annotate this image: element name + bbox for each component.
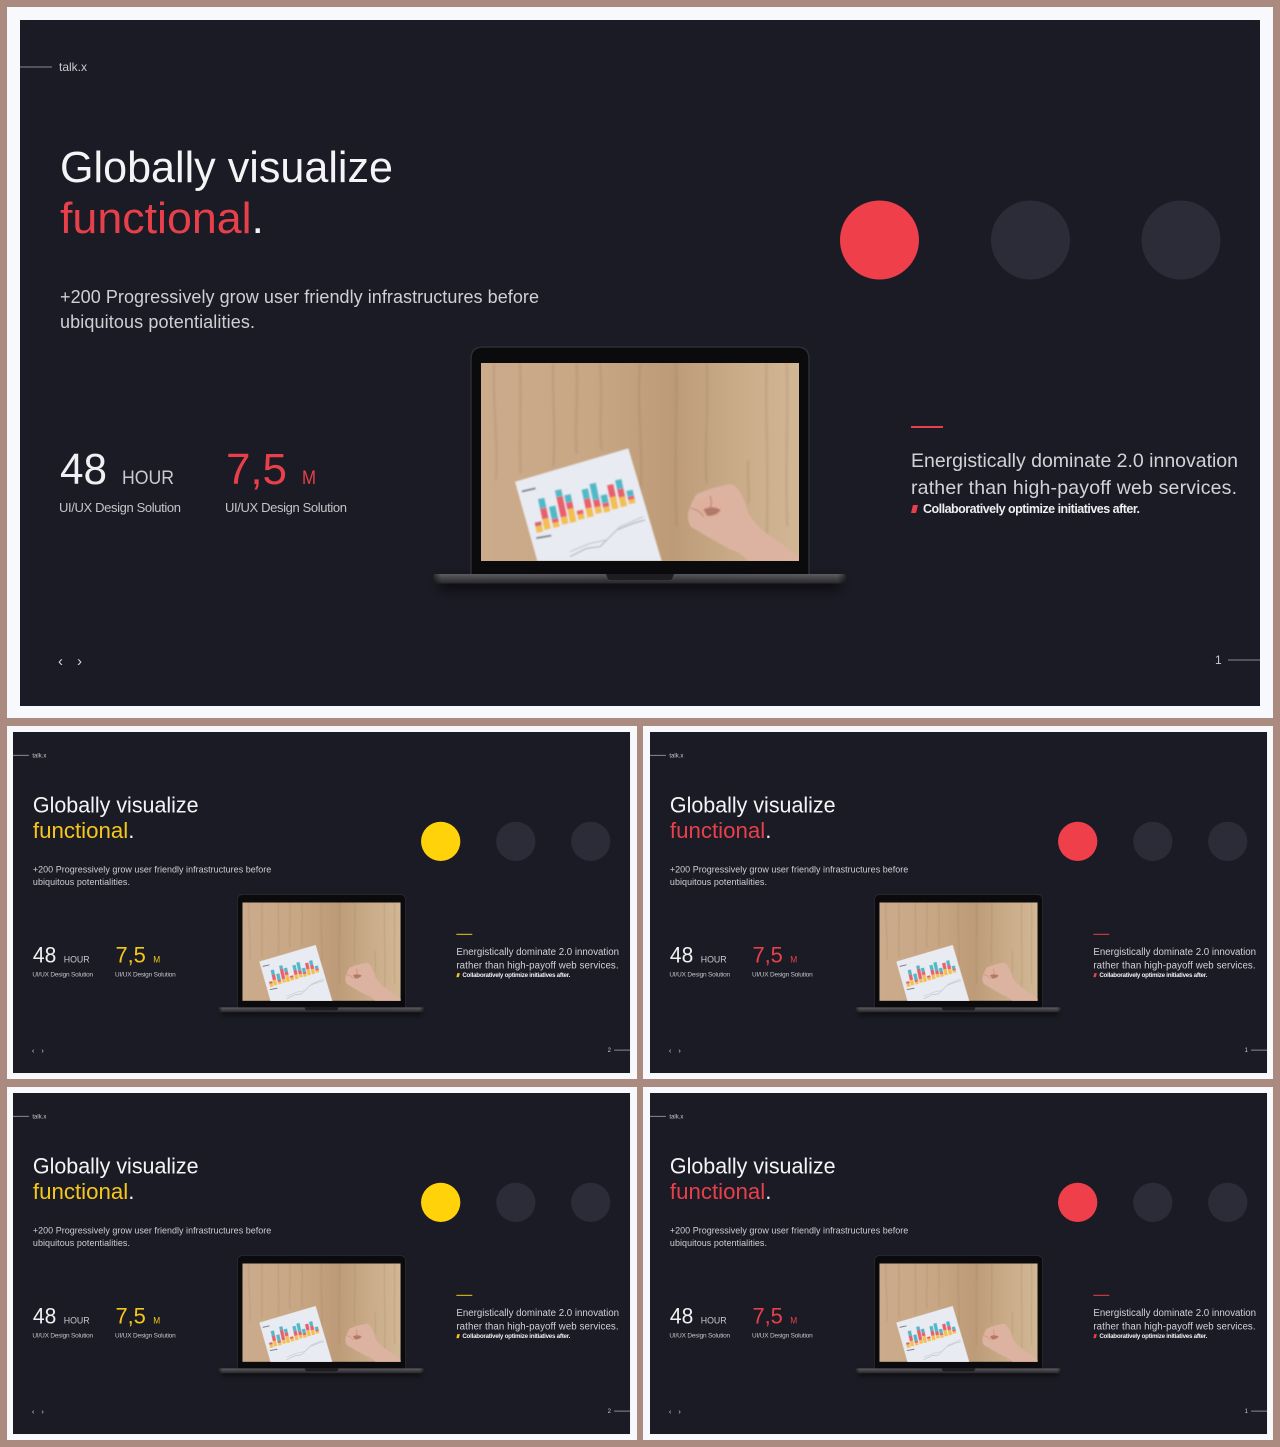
panel: slide 2 yellow, top left <box>7 726 637 1079</box>
slide frame <box>643 726 1273 1079</box>
slide content: 7,5 <box>116 1304 146 1329</box>
slide content: +200 Progressively grow user friendly infrastructures before <box>33 865 271 875</box>
slide content: Collaboratively optimize initiatives after. <box>462 972 571 979</box>
slide content: 48 <box>670 1304 693 1329</box>
panel: main slide <box>7 7 1273 718</box>
slide content: 1 <box>1245 1409 1249 1415</box>
intro text: ubiquitous potentialities. <box>60 312 255 332</box>
slide content: ubiquitous potentialities. <box>33 1238 130 1248</box>
slide content: +200 Progressively grow user friendly infrastructures before <box>670 865 908 875</box>
brand label: talk.x <box>59 60 87 74</box>
slide content: › <box>678 1407 681 1416</box>
slide content: M <box>790 1316 797 1327</box>
slide content: 7,5 <box>116 943 146 968</box>
slide content: UI/UX Design Solution <box>669 972 731 979</box>
slide content: talk.x <box>32 1114 46 1120</box>
slide content: UI/UX Design Solution <box>752 972 813 979</box>
slide content: functional. <box>670 818 771 843</box>
slide frame <box>7 726 637 1079</box>
slide content: talk.x <box>669 753 683 759</box>
slide content: functional. <box>670 1179 771 1204</box>
slide content <box>650 1093 1267 1434</box>
slide content: HOUR <box>701 1316 727 1327</box>
title <box>60 143 393 243</box>
slide content: UI/UX Design Solution <box>32 972 94 979</box>
slide content: UI/UX Design Solution <box>669 1333 731 1340</box>
stat: 7,5 M: M <box>302 468 316 489</box>
slide content: HOUR <box>64 955 90 966</box>
panel: slide 1 red, bottom right <box>643 1087 1273 1440</box>
slide background <box>20 20 1260 706</box>
slide content: 2 <box>608 1048 612 1054</box>
slide content: UI/UX Design Solution <box>115 972 176 979</box>
slide content: +200 Progressively grow user friendly infrastructures before <box>670 1226 908 1236</box>
slide content: talk.x <box>32 753 46 759</box>
slide content: Collaboratively optimize initiatives after. <box>1099 1333 1208 1340</box>
slide content: Globally visualize <box>670 1154 836 1179</box>
slide content: UI/UX Design Solution <box>115 1333 176 1340</box>
page number: 1 <box>1215 653 1222 667</box>
slide content: UI/UX Design Solution <box>752 1333 813 1340</box>
slide content: Globally visualize <box>670 793 836 818</box>
slide content <box>13 732 630 1073</box>
slide content: 48 <box>33 1304 56 1329</box>
slide content: › <box>41 1046 44 1055</box>
slide content: rather than high-payoff web services. <box>1093 1322 1256 1333</box>
slide content: ‹ <box>32 1046 35 1055</box>
brand label <box>20 60 87 74</box>
slide content: ‹ <box>669 1046 672 1055</box>
slide frame <box>643 1087 1273 1440</box>
navigation arrows: ‹ <box>58 653 63 670</box>
slide content: ‹ <box>32 1407 35 1416</box>
stat: 48 hour <box>59 445 181 515</box>
slide content: › <box>41 1407 44 1416</box>
slide frame <box>7 1087 637 1440</box>
panel: slide 2 yellow, bottom left <box>7 1087 637 1440</box>
slide content: M <box>153 955 160 966</box>
page number <box>1215 653 1260 667</box>
navigation arrows: › <box>77 653 82 670</box>
stat: 48 hour: UI/UX Design Solution <box>59 500 181 515</box>
slide content: Energistically dominate 2.0 innovation <box>1093 1308 1256 1319</box>
slide content: Energistically dominate 2.0 innovation <box>1093 947 1256 958</box>
slide content: 7,5 <box>753 943 783 968</box>
slide frame <box>7 7 1273 718</box>
slide content: › <box>678 1046 681 1055</box>
intro text: +200 Progressively grow user friendly infrastructures before <box>60 287 539 307</box>
slide content: ubiquitous potentialities. <box>670 1238 767 1248</box>
slide content <box>13 1093 630 1434</box>
slide content: Energistically dominate 2.0 innovation <box>456 1308 619 1319</box>
title: Globally visualize <box>60 143 393 192</box>
slide content: rather than high-payoff web services. <box>456 1322 619 1333</box>
slide content: talk.x <box>669 1114 683 1120</box>
laptop with chart photo <box>433 347 846 590</box>
slide content: Collaboratively optimize initiatives after. <box>1099 972 1208 979</box>
slide content <box>650 732 1267 1073</box>
slide content: Collaboratively optimize initiatives after. <box>462 1333 571 1340</box>
slide content: UI/UX Design Solution <box>32 1333 94 1340</box>
slide content: Globally visualize <box>33 1154 199 1179</box>
circle indicators <box>840 200 1220 280</box>
slide content: rather than high-payoff web services. <box>1093 961 1256 972</box>
slide content: 48 <box>670 943 693 968</box>
slide content: 1 <box>1245 1048 1249 1054</box>
stat: 7,5 M: UI/UX Design Solution <box>225 500 347 515</box>
slide content: 2 <box>608 1409 612 1415</box>
intro text <box>60 287 539 332</box>
slide content: rather than high-payoff web services. <box>456 961 619 972</box>
slide content: 7,5 <box>753 1304 783 1329</box>
side text: Collaboratively optimize initiatives after. <box>923 502 1140 516</box>
side text <box>911 426 1238 516</box>
stat: 48 hour: HOUR <box>122 468 174 489</box>
title: functional. <box>60 194 264 243</box>
panel: slide 1 red, top right <box>643 726 1273 1079</box>
slide content: HOUR <box>701 955 727 966</box>
slide content: Energistically dominate 2.0 innovation <box>456 947 619 958</box>
side text: rather than high-payoff web services. <box>911 477 1237 499</box>
slide content: M <box>153 1316 160 1327</box>
navigation arrows <box>58 653 82 670</box>
stat: 7,5 M <box>225 445 347 515</box>
slide content: +200 Progressively grow user friendly infrastructures before <box>33 1226 271 1236</box>
stat: 48 hour: 48 <box>60 445 107 494</box>
slide content: M <box>790 955 797 966</box>
slide content: HOUR <box>64 1316 90 1327</box>
stat: 7,5 M: 7,5 <box>226 445 287 494</box>
slide content: functional. <box>33 818 134 843</box>
side text: Energistically dominate 2.0 innovation <box>911 450 1238 472</box>
slide content: Globally visualize <box>33 793 199 818</box>
slide content: 48 <box>33 943 56 968</box>
slide content: ‹ <box>669 1407 672 1416</box>
slide content: functional. <box>33 1179 134 1204</box>
slide content: ubiquitous potentialities. <box>670 877 767 887</box>
slide content: ubiquitous potentialities. <box>33 877 130 887</box>
